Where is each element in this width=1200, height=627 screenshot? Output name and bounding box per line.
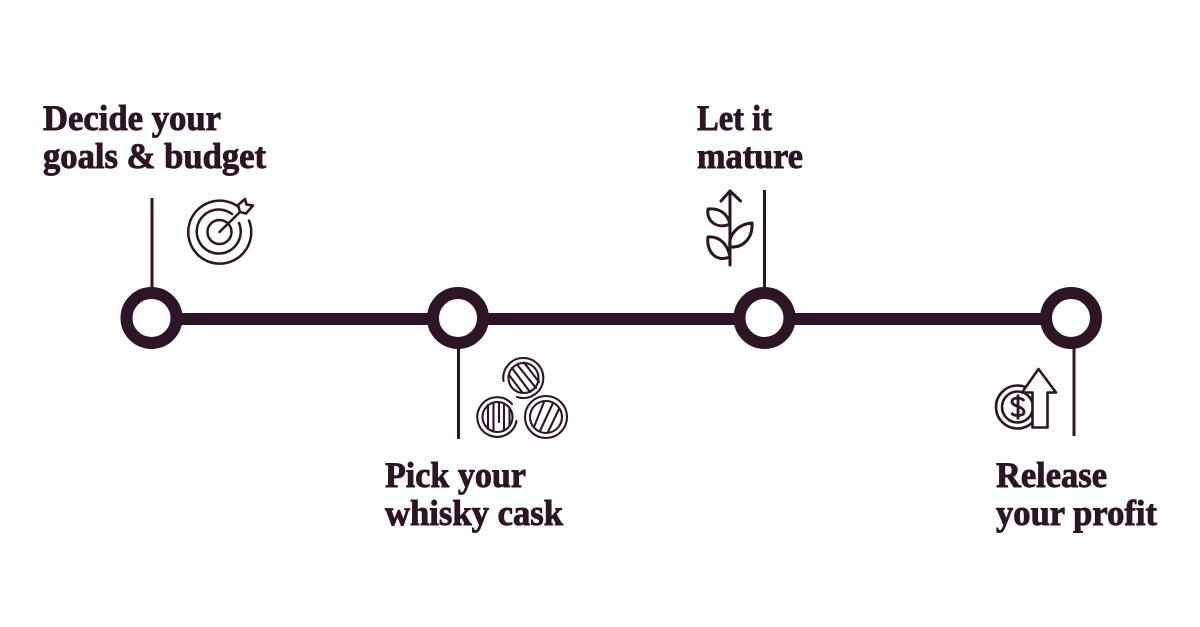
heading: step 3: Let it — [697, 98, 772, 138]
heading: step 2: whisky cask — [385, 493, 563, 533]
node: step 2 — [433, 293, 483, 343]
barrel: bottom right — [525, 396, 567, 438]
dollar sign — [1012, 394, 1024, 420]
heading: step 3: mature — [697, 136, 803, 176]
barrel: top — [503, 358, 543, 398]
heading: step 4 — [996, 455, 1157, 533]
icon: coin with profit arrow — [996, 369, 1056, 428]
up arrow — [1022, 369, 1056, 428]
heading: step 1: Decide your — [43, 98, 221, 138]
node: step 3 — [740, 293, 790, 343]
heading: step 1: goals & budget — [43, 136, 266, 176]
timeline bar — [151, 313, 1071, 325]
icon: three barrels — [477, 358, 567, 438]
heading: step 1 — [43, 98, 266, 176]
heading: step 4: Release — [996, 455, 1107, 495]
node: step 1 — [126, 293, 176, 343]
heading: step 2: Pick your — [385, 455, 526, 495]
connector: step 4 — [1072, 345, 1076, 436]
connector: step 2 — [457, 345, 460, 439]
heading: step 4: your profit — [996, 493, 1157, 533]
heading: step 2 — [385, 455, 563, 533]
connector: step 1 — [150, 198, 154, 293]
connector: step 3 — [763, 190, 766, 293]
node: step 4 — [1046, 293, 1096, 343]
heading: step 3 — [697, 98, 803, 176]
icon: plant with growth arrow — [708, 191, 752, 265]
icon: target with arrow — [188, 199, 253, 264]
barrel: bottom left — [477, 397, 516, 437]
